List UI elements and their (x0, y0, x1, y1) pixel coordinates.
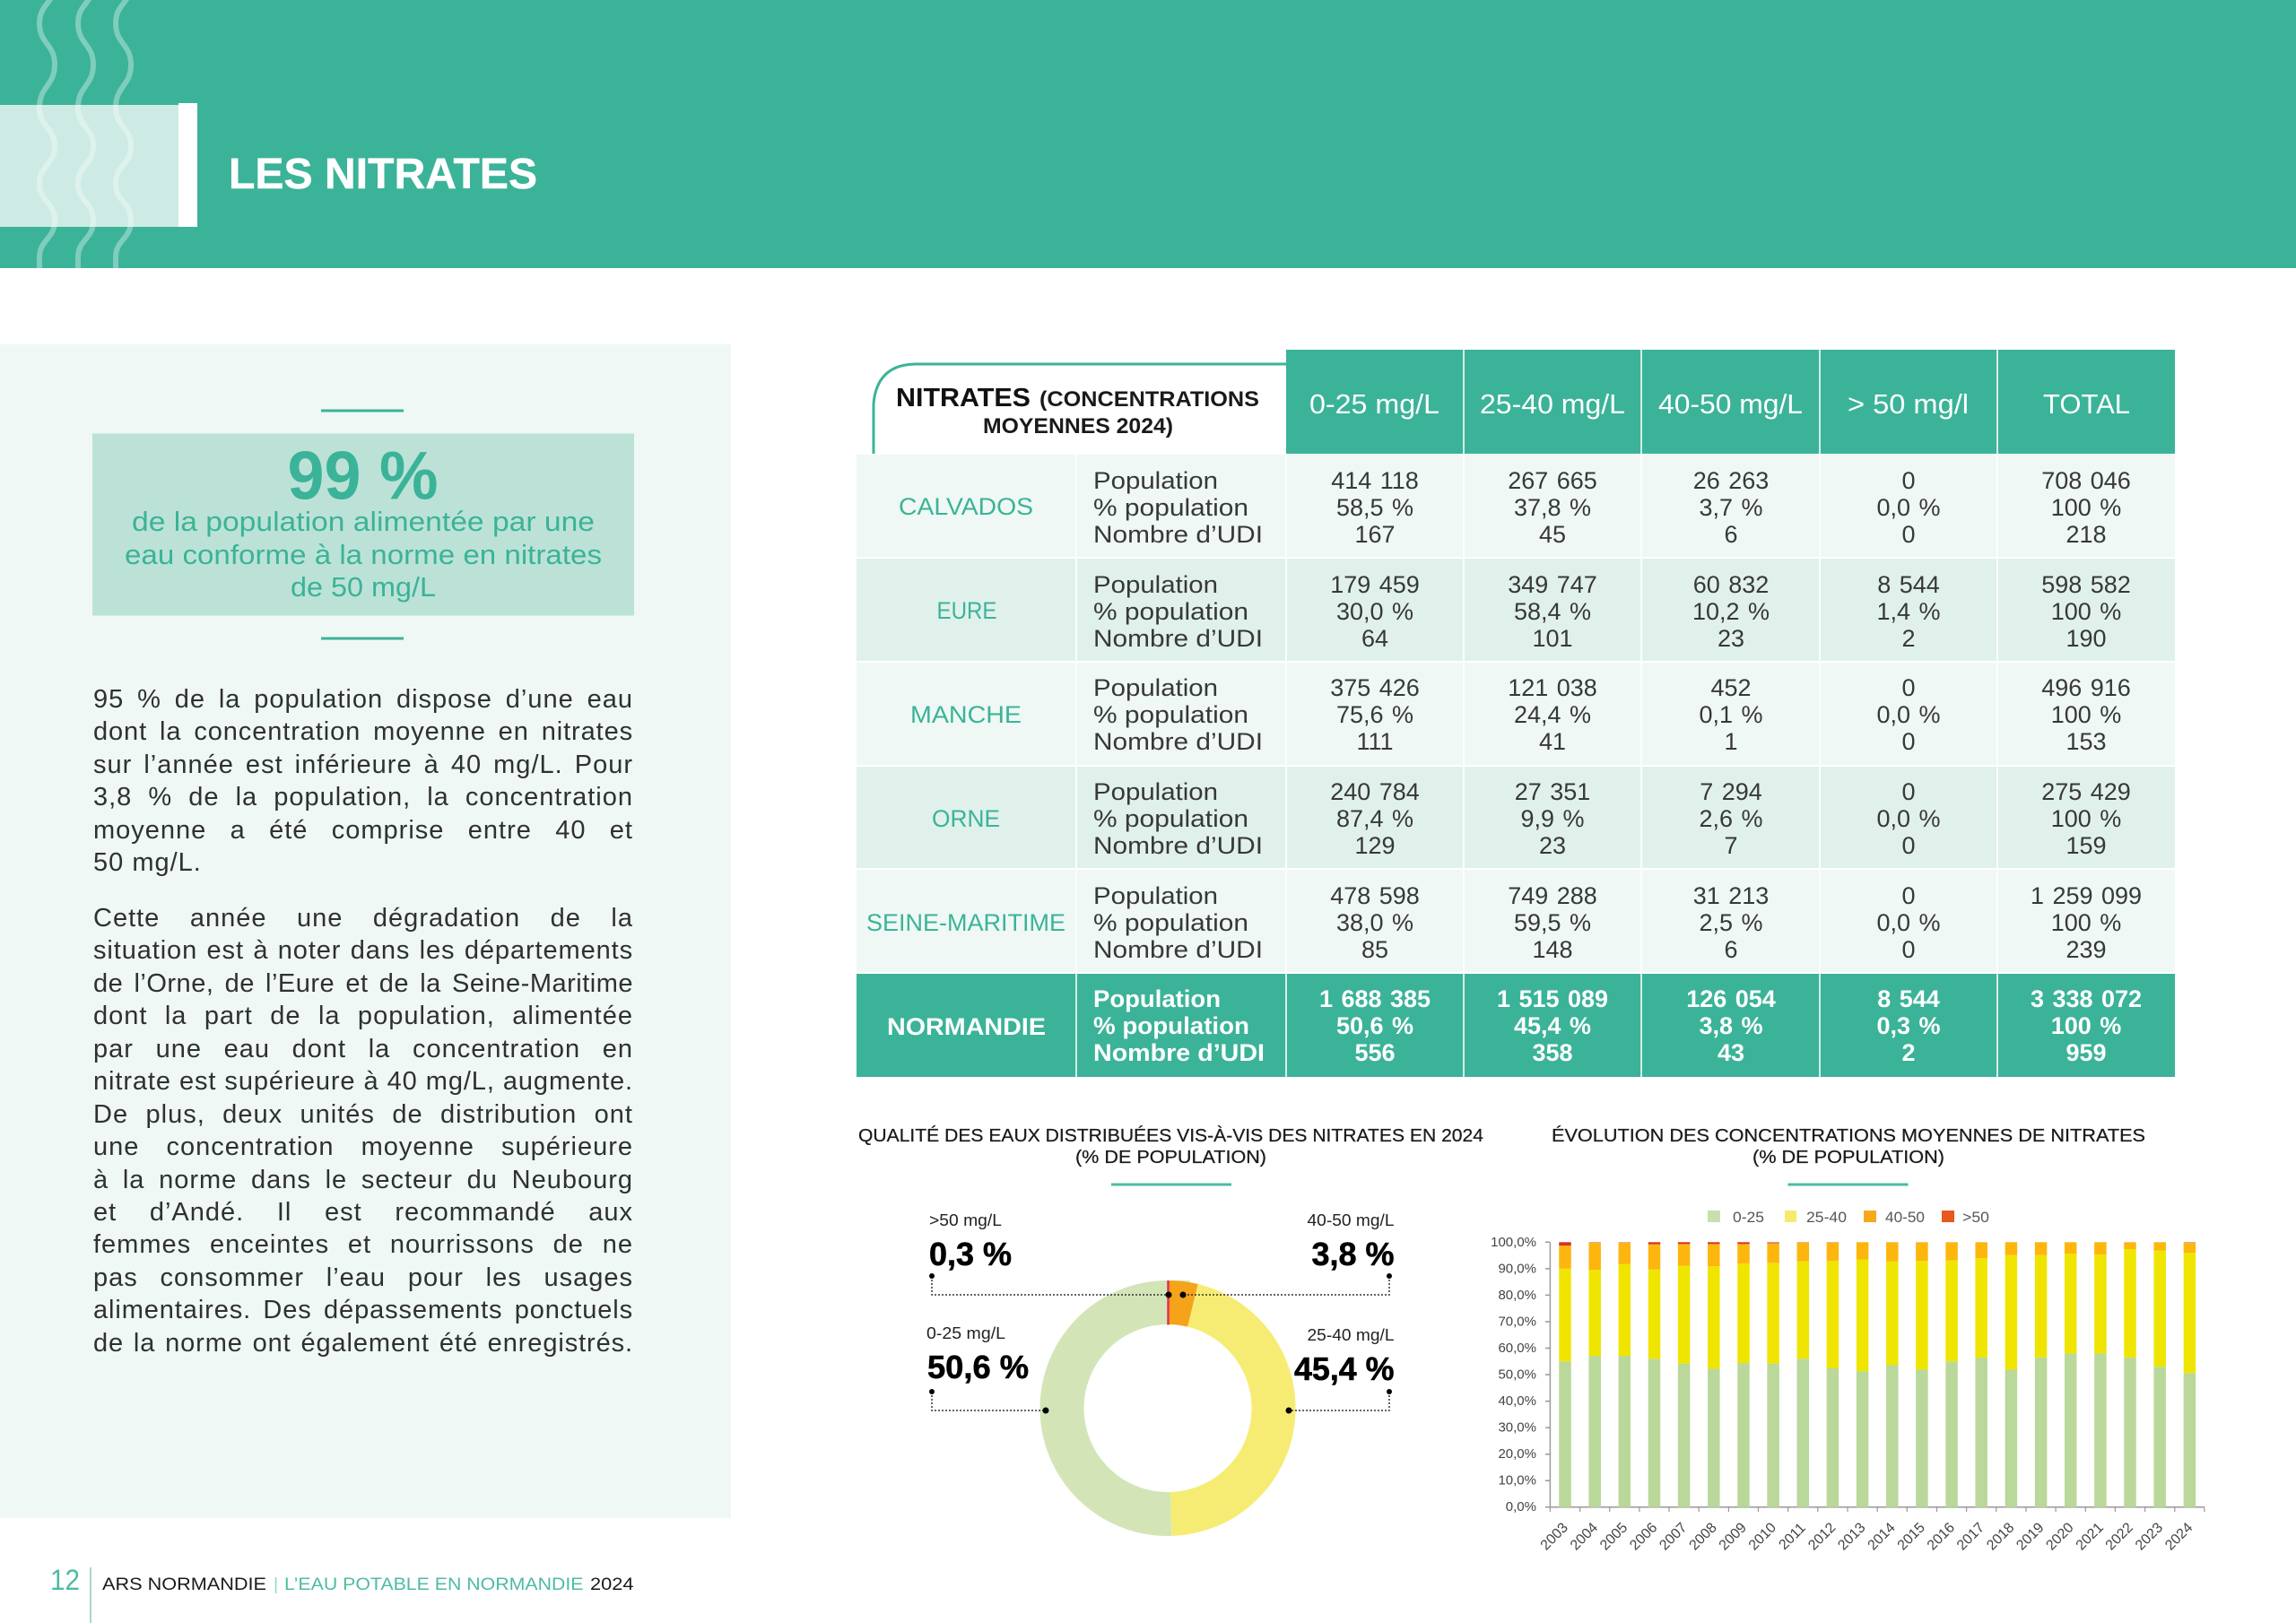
table row: Calvados: 26 263 (1693, 467, 1769, 494)
table row: Seine-Maritime: 0 (1901, 882, 1916, 909)
callout: 0-25 mg/L: 0-25 mg/L (926, 1324, 1005, 1342)
callout: above 50 mg/L: >50 mg/L (929, 1211, 1002, 1229)
table row: Seine-Maritime: 0 (1901, 936, 1916, 963)
text block: second paragraph: femmes enceintes et nourrissons de ne (93, 1230, 633, 1259)
table row: Eure: 179 459 (1330, 571, 1420, 598)
bar chart x axis: 2010 (1746, 1520, 1779, 1553)
table row: Calvados: 0 (1901, 521, 1916, 548)
table row: Seine-Maritime: 100 % (2051, 909, 2121, 936)
heading: bar chart (1552, 1125, 2145, 1185)
table row: Eure: 2 (1901, 625, 1916, 652)
bar chart x axis: 2011 (1776, 1521, 1809, 1553)
table row: Seine-Maritime: 478 598 (1330, 882, 1420, 909)
callout: 40-50 mg/L (1180, 1211, 1394, 1298)
table row: Orne: 7 294 (1700, 778, 1762, 805)
table row: Normandie total: NORMANDIE (887, 1013, 1046, 1040)
callout: above 50 mg/L: 0,3 % (929, 1236, 1012, 1272)
table row: Orne (857, 767, 2175, 868)
table header: concentration columns: TOTAL (2043, 388, 2130, 420)
table header: concentration columns (1286, 350, 2175, 454)
table row: Normandie total: 43 (1718, 1039, 1744, 1066)
table row: Manche: 75,6 % (1336, 701, 1413, 728)
table row: Orne: 0 (1901, 832, 1916, 859)
table row: Eure: 64 (1361, 625, 1388, 652)
text block: second paragraph: par une eau dont la concentration en (93, 1035, 633, 1063)
bar chart y axis: 80,0% (1498, 1288, 1536, 1303)
table row: Calvados: CALVADOS (899, 493, 1033, 520)
table row: Orne: 100 % (2051, 805, 2121, 832)
footer: L’EAU POTABLE EN NORMANDIE (284, 1575, 583, 1594)
table row: Orne: 23 (1539, 832, 1566, 859)
table row: Seine-Maritime: SEINE-MARITIME (866, 909, 1065, 936)
table row: Calvados: 218 (2066, 521, 2107, 548)
table row: Normandie total: 100 % (2051, 1012, 2121, 1039)
text block: first paragraph (93, 685, 633, 877)
table row: Calvados: 267 665 (1508, 467, 1597, 494)
table row: Manche: 153 (2066, 728, 2107, 755)
table row: Eure (857, 559, 2175, 661)
table row: Manche: MANCHE (910, 701, 1022, 728)
footer: 12 (50, 1564, 80, 1596)
table row: Orne: 0 (1901, 778, 1916, 805)
table row: Normandie total: % population (1093, 1012, 1249, 1039)
bar chart y axis: 50,0% (1498, 1367, 1536, 1383)
bar chart legend: >50 (1962, 1209, 1989, 1226)
table row: Normandie total: 126 054 (1686, 985, 1776, 1012)
table row: Normandie total (857, 974, 2175, 1077)
table row: Manche: 24,4 % (1514, 701, 1591, 728)
table row: Manche: Population (1093, 674, 1218, 701)
table row: Orne: 27 351 (1515, 778, 1590, 805)
table row: Eure: 101 (1532, 625, 1573, 652)
bar chart x axis: 2013 (1835, 1520, 1869, 1553)
table row: Manche: % population (1093, 701, 1248, 728)
table row: Normandie total: 2 (1901, 1039, 1916, 1066)
table row: Calvados: 708 046 (2041, 467, 2131, 494)
table row: Orne: ORNE (932, 805, 1000, 832)
header tab: light rectangle and white bar (0, 103, 197, 227)
table column separators (1075, 455, 1998, 972)
bar chart y axis: 90,0% (1498, 1261, 1536, 1277)
heading: bar chart: (% DE POPULATION) (1752, 1147, 1944, 1167)
table row: Normandie total: Population (1093, 985, 1221, 1012)
table row: Orne: 7 (1724, 832, 1738, 859)
bar chart y axis: 20,0% (1498, 1446, 1536, 1462)
table row: Seine-Maritime (857, 870, 2175, 972)
callout: 25-40 mg/L: 25-40 mg/L (1308, 1325, 1394, 1344)
table header: title with rounded outline (874, 364, 1286, 454)
text block: second paragraph: De plus, deux unités de distribution ont (93, 1100, 633, 1129)
callout: above 50 mg/L (929, 1211, 1171, 1298)
bar chart legend: 40-50 (1885, 1209, 1925, 1226)
callout: 25-40 mg/L (1286, 1325, 1394, 1413)
table row: Calvados: 45 (1539, 521, 1566, 548)
table row: Seine-Maritime: Nombre d’UDI (1093, 936, 1263, 963)
table row: Orne: 2,6 % (1699, 805, 1763, 832)
table row: Manche: 121 038 (1508, 674, 1597, 701)
table row: Orne: Nombre d’UDI (1093, 832, 1263, 859)
table row: Eure: Population (1093, 571, 1218, 598)
bar chart x axis: 2005 (1597, 1520, 1631, 1553)
table row: Seine-Maritime: % population (1093, 909, 1248, 936)
table row: Normandie total: 50,6 % (1336, 1012, 1413, 1039)
text block: second paragraph: situation est à noter dans les départements (93, 936, 633, 965)
bar chart x axis: 2009 (1717, 1520, 1750, 1553)
header band (0, 0, 2296, 268)
table row: Eure: 349 747 (1508, 571, 1597, 598)
table row: Manche: 452 (1710, 674, 1752, 701)
key figure caption: de 50 mg/L (291, 571, 436, 603)
table row: Orne: 87,4 % (1336, 805, 1413, 832)
bar chart x axis (1538, 1507, 2205, 1553)
footer (50, 1564, 634, 1623)
table row: Normandie total: 8 544 (1877, 985, 1940, 1012)
bar chart x axis: 2018 (1984, 1520, 2017, 1553)
table row: Manche (857, 663, 2175, 765)
bar chart x axis: 2022 (2103, 1520, 2136, 1553)
bar chart x axis: 2003 (1538, 1520, 1571, 1553)
table row: Normandie total: 3 338 072 (2031, 985, 2142, 1012)
table row: Manche: Nombre d’UDI (1093, 728, 1263, 755)
bar chart y axis: 60,0% (1498, 1341, 1536, 1356)
callout: 40-50 mg/L: 3,8 % (1311, 1236, 1394, 1272)
table row: Eure: 598 582 (2041, 571, 2131, 598)
text block: second paragraph: alimentaires. Des dépassements ponctuels (93, 1296, 633, 1324)
text block: second paragraph: Cette année une dégradation de la (93, 904, 633, 933)
bar chart x axis: 2021 (2074, 1520, 2107, 1553)
table row: Normandie total: 1 688 385 (1319, 985, 1431, 1012)
table row: Orne: 0,0 % (1876, 805, 1941, 832)
table row: Orne: 159 (2066, 832, 2107, 859)
table row: Normandie total: 556 (1354, 1039, 1396, 1066)
bar chart x axis: 2014 (1866, 1520, 1899, 1553)
table row: Eure: 58,4 % (1514, 598, 1591, 625)
key figure caption: de la population alimentée par une (132, 506, 595, 537)
text block: second paragraph: de l’Orne, de l’Eure et de la Seine-Maritime (93, 969, 633, 998)
table header: concentration columns: 40-50 mg/L (1658, 388, 1803, 420)
table row: Seine-Maritime: 2,5 % (1699, 909, 1763, 936)
table row: Seine-Maritime: 1 259 099 (2031, 882, 2142, 909)
bar chart legend (1708, 1209, 1989, 1226)
bar chart x axis: 2004 (1568, 1520, 1601, 1553)
table row: Normandie total: 1 515 089 (1497, 985, 1608, 1012)
key figure caption (125, 506, 602, 603)
bar chart y axis: 100,0% (1491, 1235, 1536, 1250)
table header: title with rounded outline: NITRATES (896, 384, 1031, 412)
table row: Seine-Maritime: 59,5 % (1514, 909, 1591, 936)
heading: donut chart: (% DE POPULATION) (1075, 1147, 1266, 1167)
bar chart y axis: 10,0% (1498, 1472, 1536, 1488)
text block: second paragraph: une concentration moyenne supérieure (93, 1133, 633, 1161)
title: LES NITRATES (229, 151, 537, 198)
bar chart: stacked bars 2003-2024 (1559, 1242, 2196, 1507)
table row: Manche: 0,1 % (1699, 701, 1763, 728)
table row: Calvados: 0,0 % (1876, 494, 1941, 521)
bar chart x axis: 2016 (1925, 1520, 1958, 1553)
table header: title with rounded outline: (CONCENTRATIONS (1039, 387, 1259, 412)
heading: bar chart: ÉVOLUTION DES CONCENTRATIONS MOYENNES DE NITRATES (1552, 1125, 2145, 1146)
text block: first paragraph: 95 % de la population dispose d’une eau (93, 685, 633, 714)
table row: Normandie total: 3,8 % (1699, 1012, 1763, 1039)
heading: donut chart (858, 1125, 1483, 1185)
text block: first paragraph: dont la concentration moyenne en nitrates (93, 717, 633, 746)
table row: Eure: % population (1093, 598, 1248, 625)
bar chart x axis: 2012 (1805, 1520, 1839, 1553)
heading: donut chart: QUALITÉ DES EAUX DISTRIBUÉES VIS-À-VIS DES NITRATES EN 2024 (858, 1125, 1483, 1146)
table row: Seine-Maritime: 6 (1724, 936, 1738, 963)
table row: Manche: 0 (1901, 728, 1916, 755)
text block: first paragraph: 50 mg/L. (93, 848, 202, 877)
table row: Eure: 190 (2066, 625, 2107, 652)
table row: Seine-Maritime: 148 (1532, 936, 1573, 963)
table header: concentration columns: 0-25 mg/L (1309, 388, 1439, 420)
bar chart y axis: 30,0% (1498, 1420, 1536, 1435)
bar chart x axis: 2020 (2043, 1520, 2077, 1553)
table row: Calvados: 414 118 (1331, 467, 1419, 494)
bar chart y axis (1491, 1235, 1550, 1515)
table row: Manche: 0,0 % (1876, 701, 1941, 728)
table row: Manche: 496 916 (2041, 674, 2131, 701)
table row: Eure: Nombre d’UDI (1093, 625, 1263, 652)
table row: Manche: 100 % (2051, 701, 2121, 728)
bar chart x axis: 2023 (2133, 1520, 2166, 1553)
key figure caption: eau conforme à la norme en nitrates (125, 539, 602, 570)
table row: Eure: EURE (936, 597, 997, 624)
table row: Normandie total: 45,4 % (1514, 1012, 1591, 1039)
table header: concentration columns: 25-40 mg/L (1480, 388, 1625, 420)
table row: Seine-Maritime: 0,0 % (1876, 909, 1941, 936)
table row: Orne: 9,9 % (1520, 805, 1585, 832)
table row: Normandie total: 959 (2066, 1039, 2107, 1066)
table row: Manche: 1 (1724, 728, 1738, 755)
table row: Normandie total: 0,3 % (1876, 1012, 1941, 1039)
table header: title with rounded outline: MOYENNES 2024) (983, 414, 1173, 438)
bar chart x axis: 2017 (1954, 1520, 1987, 1553)
bar chart y axis: 0,0% (1506, 1499, 1536, 1515)
text block: second paragraph (93, 904, 633, 1358)
table row: Calvados: 37,8 % (1514, 494, 1591, 521)
table row: Calvados: % population (1093, 494, 1248, 521)
table row: Calvados: 0 (1901, 467, 1916, 494)
key figure callout (92, 409, 634, 640)
bar chart x axis: 2019 (2013, 1520, 2048, 1553)
panel: left summary background (0, 344, 731, 1518)
footer: ARS NORMANDIE (102, 1575, 266, 1594)
text block: second paragraph: dont la part de la population, alimentée (93, 1002, 633, 1030)
bar chart y axis: 40,0% (1498, 1393, 1536, 1409)
table row: Manche: 41 (1539, 728, 1566, 755)
bar chart x axis: 2007 (1657, 1520, 1691, 1553)
table row: Seine-Maritime: 85 (1361, 936, 1388, 963)
table row: Calvados: 6 (1724, 521, 1738, 548)
table row: Eure: 10,2 % (1692, 598, 1770, 625)
table row: Calvados: 100 % (2051, 494, 2121, 521)
table row: Eure: 100 % (2051, 598, 2121, 625)
table row: Normandie total: Nombre d’UDI (1093, 1039, 1265, 1066)
table row: Orne: 240 784 (1330, 778, 1420, 805)
table row: Eure: 60 832 (1693, 571, 1769, 598)
footer: 2024 (590, 1575, 634, 1594)
text block: second paragraph: et d’Andé. Il est recommandé aux (93, 1198, 633, 1227)
text block: second paragraph: pas consommer l’eau pour les usages (93, 1263, 633, 1292)
callout: 40-50 mg/L: 40-50 mg/L (1308, 1211, 1394, 1229)
text block: first paragraph: sur l’année est inférieure à 40 mg/L. Pour (93, 751, 633, 779)
table row: Orne: Population (1093, 778, 1218, 805)
bar chart x axis: 2006 (1627, 1520, 1660, 1553)
table row: Seine-Maritime: Population (1093, 882, 1218, 909)
bar chart y axis: 70,0% (1498, 1315, 1536, 1329)
text block: second paragraph: nitrate est supérieure à 40 mg/L, augmente. (93, 1067, 633, 1096)
table row: Orne: 275 429 (2041, 778, 2131, 805)
callout: 0-25 mg/L (926, 1324, 1049, 1413)
table row: Normandie total: 358 (1532, 1039, 1573, 1066)
callout: 25-40 mg/L: 45,4 % (1294, 1350, 1394, 1387)
bar chart legend: 25-40 (1806, 1209, 1847, 1226)
key figure: 99 %: 99 % (287, 438, 438, 515)
table row: Eure: 23 (1718, 625, 1744, 652)
footer: | (274, 1575, 278, 1594)
table row: Calvados: Nombre d’UDI (1093, 521, 1263, 548)
text block: first paragraph: 3,8 % de la population, la concentration (93, 783, 633, 812)
table row: Manche: 0 (1901, 674, 1916, 701)
bar chart x axis: 2024 (2162, 1520, 2196, 1553)
table row: Calvados: 167 (1354, 521, 1396, 548)
table header: concentration columns: > 50 mg/l (1848, 388, 1969, 420)
bar chart x axis: 2008 (1687, 1520, 1720, 1553)
table row: Calvados: Population (1093, 467, 1218, 494)
text block: second paragraph: de la norme ont également été enregistrés. (93, 1329, 633, 1358)
icon: three water waves (39, 0, 131, 268)
text block: second paragraph: à la norme dans le secteur du Neubourg (93, 1166, 633, 1194)
bar chart x axis: 2015 (1895, 1520, 1928, 1553)
donut chart (1062, 1280, 1274, 1514)
table row: Seine-Maritime: 38,0 % (1336, 909, 1413, 936)
table row: Eure: 30,0 % (1336, 598, 1413, 625)
callout: 0-25 mg/L: 50,6 % (927, 1349, 1029, 1385)
table row: Orne: % population (1093, 805, 1248, 832)
table row: Orne: 129 (1354, 832, 1396, 859)
table row: Calvados: 58,5 % (1336, 494, 1413, 521)
table row: Manche: 375 426 (1330, 674, 1420, 701)
table row: Calvados (857, 455, 2175, 557)
bar chart legend: 0-25 (1733, 1209, 1764, 1226)
table row: Seine-Maritime: 239 (2066, 936, 2107, 963)
table row: Manche: 111 (1356, 728, 1394, 755)
text block: first paragraph: moyenne a été comprise entre 40 et (93, 816, 633, 845)
table row: Seine-Maritime: 31 213 (1693, 882, 1769, 909)
table row: Eure: 8 544 (1877, 571, 1940, 598)
table row: Eure: 1,4 % (1876, 598, 1941, 625)
table row: Calvados: 3,7 % (1699, 494, 1763, 521)
table row: Seine-Maritime: 749 288 (1508, 882, 1597, 909)
